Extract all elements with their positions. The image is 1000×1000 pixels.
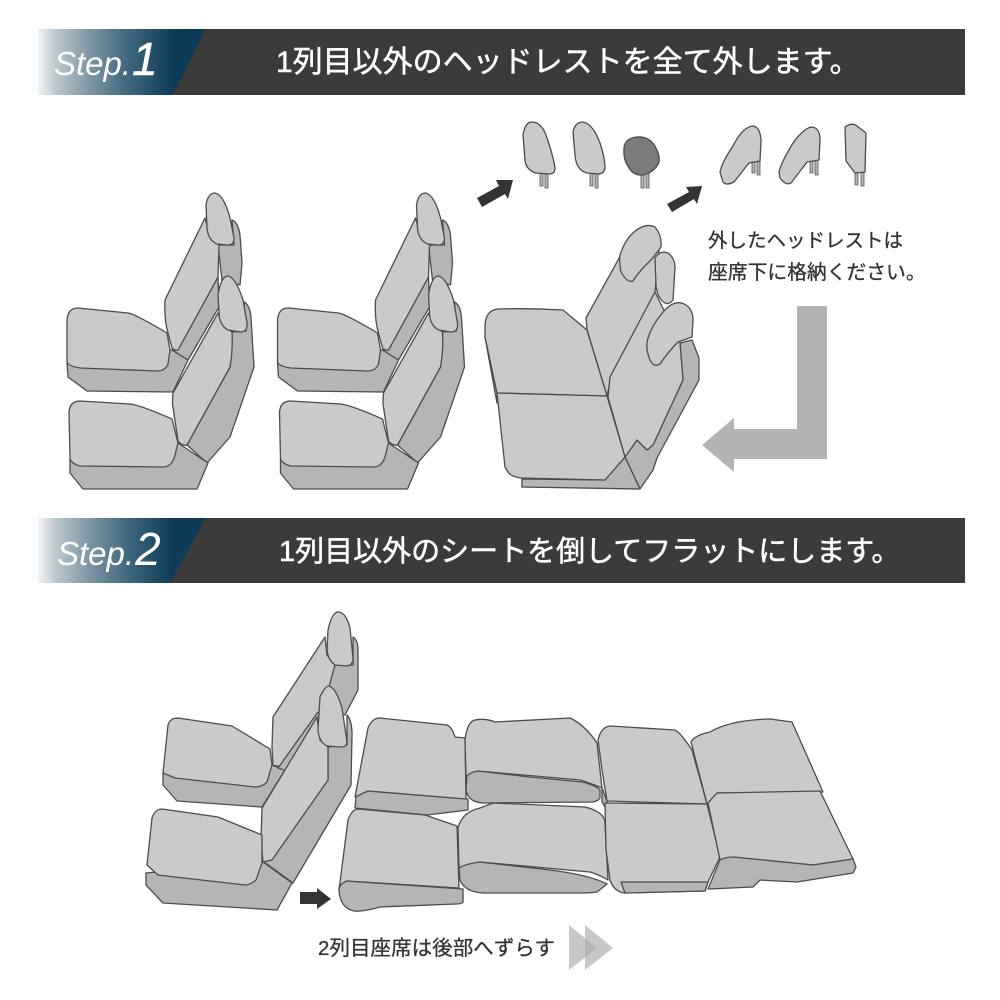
step 2 banner (38, 518, 965, 583)
row 2 upper cushion (355, 718, 466, 799)
rear seat cushion (163, 718, 272, 787)
front seat back (261, 717, 328, 862)
rear seat base (163, 765, 285, 807)
headrest 6 (845, 124, 866, 173)
arrow: shift second row (300, 888, 331, 909)
row 3 upper dark (466, 771, 600, 803)
seat back (586, 233, 660, 396)
row 4 lower (605, 803, 720, 893)
seat base (522, 457, 640, 489)
headrest 1 (523, 122, 555, 174)
small joint between rows (602, 788, 607, 810)
strip between rows (278, 712, 322, 772)
lower cushion (497, 393, 625, 480)
arrow: to second headrest group (667, 186, 702, 212)
step 2 heading: 1列目以外のシートを倒してフラットにします。 (279, 535, 900, 568)
row 3 lower dark (459, 862, 607, 893)
row 3 lower cushion (458, 803, 608, 880)
row 2 upper bolster (355, 791, 468, 815)
row 3 upper cushion (465, 718, 602, 788)
large L-shaped arrow (702, 306, 827, 472)
step 1 label: Step.1 (54, 33, 158, 85)
headrest 4 (720, 126, 761, 184)
headrest right (647, 303, 693, 365)
double chevron arrow (569, 925, 613, 970)
front seat side (264, 715, 352, 883)
upper cushion (485, 309, 607, 396)
seat illustration: rear view, folded headrests (485, 225, 699, 489)
front seat base (146, 862, 292, 910)
left sliver (485, 337, 497, 403)
rear seat side (318, 637, 358, 715)
instruction text: 外したヘッドレストは (708, 230, 903, 252)
front seat cushion (147, 809, 262, 885)
step 1 banner (38, 29, 965, 95)
headrest left (620, 225, 661, 281)
row 5 lower (708, 791, 853, 865)
headrest 2 (573, 122, 605, 174)
row 4 lower foot (621, 882, 708, 893)
headrest 5 (779, 127, 820, 184)
headrest middle (655, 252, 675, 304)
rear seat headrest (327, 612, 353, 666)
seat illustration: side view, second copy (278, 193, 464, 489)
row 2 lower cushion (339, 809, 459, 890)
instruction text: 座席下に格納ください。 (708, 262, 926, 284)
rear seat back (272, 637, 335, 767)
row 5 upper (691, 719, 823, 804)
step 2 label: Step.2 (57, 523, 161, 575)
right seat back (608, 292, 683, 457)
seat illustration: side view with headrests (67, 193, 254, 489)
instruction text (708, 230, 926, 284)
headrest 3: highlighted (624, 137, 659, 175)
front seat headrest (318, 686, 347, 747)
flattened seats (339, 718, 856, 911)
row 2 lower base (339, 881, 463, 911)
row 4 upper (598, 726, 707, 804)
row 5 foot (708, 857, 856, 889)
front row seats (146, 612, 358, 910)
caption: shift second row: 2列目座席は後部へずらす (318, 937, 555, 960)
side panel (625, 340, 699, 489)
removed headrests (523, 122, 866, 188)
step 1 heading: 1列目以外のヘッドレストを全て外します。 (276, 46, 860, 79)
arrow: to first headrest group (477, 180, 513, 207)
